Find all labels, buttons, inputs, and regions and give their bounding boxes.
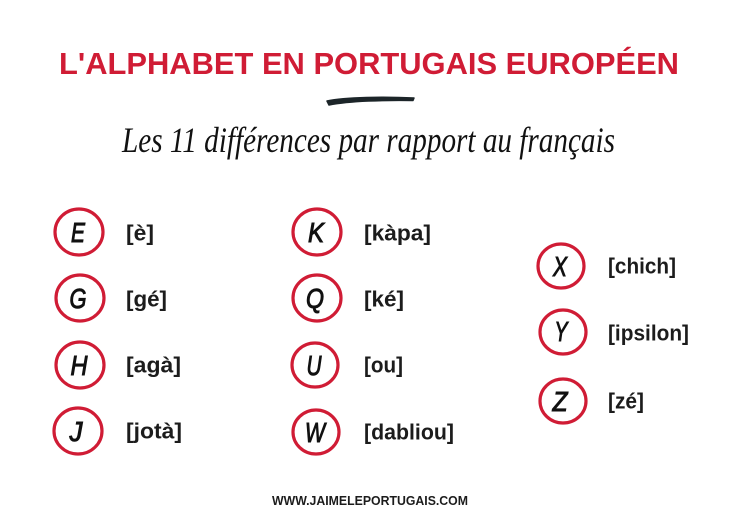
letter K: K [308,217,325,248]
letter H [56,342,104,388]
pronunciation X: [chich] [608,254,676,278]
column 3 [538,244,689,423]
letter E [55,209,103,255]
letter U [292,343,338,387]
letter K [293,209,341,255]
title: L'ALPHABET EN PORTUGAIS EUROPÉEN [59,46,679,81]
letter H: H [70,350,88,381]
column 1 [54,209,182,454]
letter W: W [305,417,327,448]
letter X: X [552,251,568,282]
pronunciation Y: [ipsilon] [608,320,689,346]
brush stroke divider [327,97,414,105]
letter Q: Q [306,283,324,314]
pronunciation E: [è] [126,220,154,246]
letter G: G [70,283,86,314]
letter Y: Y [554,316,569,347]
letter X [538,244,584,288]
letter J: J [69,416,83,447]
pronunciation Q: [ké] [364,286,404,312]
letter J [54,408,102,454]
pronunciation G: [gé] [126,286,167,312]
pronunciation W: [dabliou] [364,420,454,444]
pronunciation Z: [zé] [608,388,644,414]
pronunciation U: [ou] [364,352,403,378]
letter Y [540,310,586,354]
letter E: E [71,217,85,248]
letter U: U [306,350,322,381]
letter Z [540,379,586,423]
footer website: WWW.JAIMELEPORTUGAIS.COM [272,494,468,508]
column 2 [292,209,454,454]
letter Q [293,275,341,321]
pronunciation J: [jotà] [126,418,182,444]
letter Z: Z [552,386,568,417]
pronunciation K: [kàpa] [364,220,431,246]
subtitle: Les 11 différences par rapport au français [121,120,615,160]
letter W [293,410,339,454]
letter G [56,275,104,321]
pronunciation H: [agà] [126,352,181,378]
